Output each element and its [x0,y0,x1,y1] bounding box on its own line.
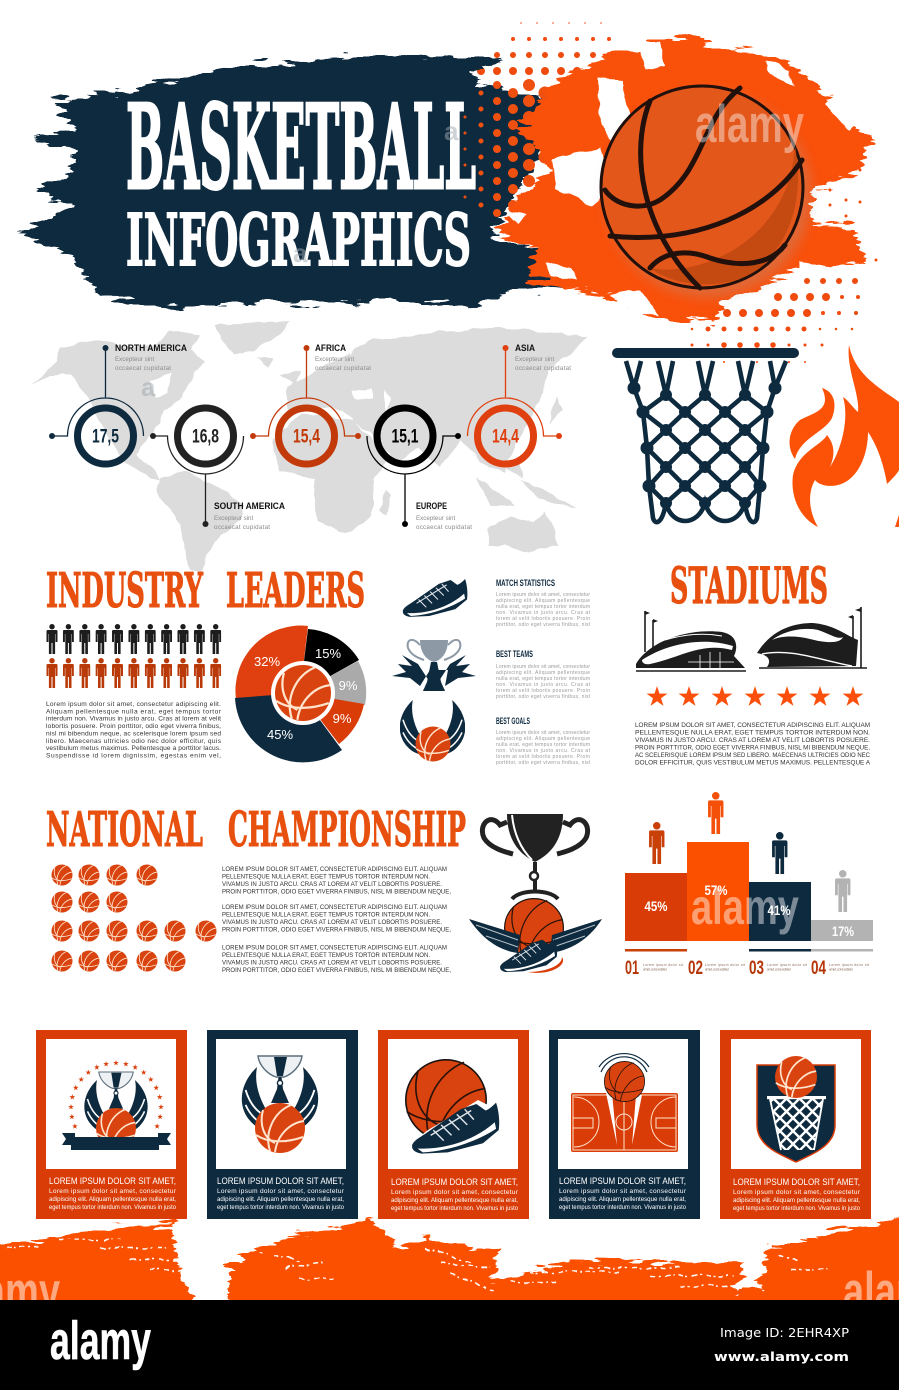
card text [733,1177,861,1212]
text: match statistics: porttitor, odio eget viverra finibus, nisl [496,622,590,628]
marker: Asia 14,4 [468,343,571,464]
panel: header banner: a [293,238,308,268]
footer image id: Image ID: 2EHR4XP [720,1326,849,1340]
card text: Lorem ipsum dolor sit amet, consectetur [559,1188,687,1195]
text block: lobortis posuere. Proin porttitor, odio eget viverra finibus, [46,723,221,730]
text block: vestibulum metus maximus. Pellentesque a porttitor lacus. [46,745,221,752]
panel: card 2 winged trophy [207,1030,358,1219]
card text: eget tempus tortor interdum non. Vivamus in justo [49,1204,176,1211]
text: best teams: adipiscing elit. Aliquam pellentesque [496,670,590,676]
marker: Asia 14,4: Excepteur sint [515,356,554,363]
card text [217,1176,345,1211]
text: best goals: porttitor, odio eget viverra finibus, nisl [496,760,590,766]
text block: LOREM IPSUM DOLOR SIT AMET, CONSECTETUR ADIPISCING ELIT. ALIQUAM [635,722,870,729]
card text: Lorem ipsum dolor sit amet, consectetur [49,1188,177,1195]
podium chart: alamy [691,879,799,935]
text: match statistics [496,578,591,628]
icon: shield, hoop and ball [757,1056,835,1162]
text: best teams: non. Vivamus in justo arcu. Cras at [496,682,591,688]
star rating [647,686,863,706]
icon: star arc [68,1060,164,1129]
heading: CHAMPIONSHIP [228,803,466,858]
card text [391,1177,519,1212]
text: match statistics: lorem at velit lobortis posuere. Proin [496,616,590,622]
icon: flame [790,345,899,527]
podium chart: Lorem ipsum dolor sit [767,963,807,967]
podium chart: amet, cons ectetur [643,968,668,972]
text: best goals: adipiscing elit. Aliquam pellentesque [496,736,590,742]
marker: South America 16,8 [150,408,285,531]
card text: LOREM IPSUM DOLOR SIT AMET, [733,1177,860,1187]
card text [559,1176,687,1211]
navy brush stroke [17,55,582,307]
card text: Lorem ipsum dolor sit amet, consectetur [733,1189,861,1196]
icon: trophy, basketball, wings and sneaker [469,814,602,973]
marker: Europe 15,1: 15,1 [392,426,419,448]
icon: emblem [242,1056,318,1153]
text: match statistics: MATCH STATISTICS [496,578,555,589]
text paragraphs [222,866,451,974]
card text: adipiscing elit. Aliquam pellentesque nulla erat, [559,1196,686,1203]
panel: stadiums [635,558,870,766]
footer logo: alamy [50,1311,151,1371]
text: best goals: BEST GOALS [496,716,530,727]
halftone dots: top rows [481,23,625,71]
title: BASKETBALL: BASKETBALL [126,79,476,216]
donut chart: 45% [267,727,293,742]
card text: eget tempus tortor interdum non. Vivamus in justo [217,1204,344,1211]
text block [635,722,870,766]
card text [49,1176,177,1211]
text paragraphs: LOREM IPSUM DOLOR SIT AMET, CONSECTETUR ADIPISCING ELIT. ALIQUAM [222,944,447,952]
icon: sneaker [403,579,467,617]
footer url: www.alamy.com [714,1349,849,1364]
heading: LEADERS [226,564,365,619]
marker: North America 17,5 [49,343,187,464]
card text: adipiscing elit. Aliquam pellentesque nulla erat, [217,1196,344,1203]
card text: LOREM IPSUM DOLOR SIT AMET, [217,1176,344,1186]
donut chart: 9% [333,711,352,726]
icon: winged basketball [400,700,465,762]
marker: Asia 14,4: 14,4 [492,426,519,448]
watermark fragments [0,1260,899,1322]
card text: eget tempus tortor interdum non. Vivamus in justo [391,1205,518,1212]
podium chart: 41% [768,902,791,918]
text: best teams: BEST TEAMS [496,649,533,660]
heading [46,564,365,619]
orange paint splash [496,33,871,323]
title: INFOGRAPHICS: INFOGRAPHICS [126,198,471,282]
marker: Africa 15,4: Excepteur sint [315,356,354,363]
text block: Suspendisse id lorem dignissim, egestas enim vel, [46,752,221,760]
podium chart: amet, cons ectetur [705,968,730,972]
text block [46,701,222,760]
panel: national championship [46,792,873,979]
heading [46,803,466,858]
text: best teams [496,649,591,700]
text block: VIVAMUS IN JUSTO ARCU. CRAS AT LOREM AT VELIT LOBORTIS POSUERE. [635,737,870,744]
podium chart: 03 [749,958,764,979]
card text: adipiscing elit. Aliquam pellentesque nulla erat, [49,1196,176,1203]
pictogram: basketball counts [52,864,216,972]
panel: card 4 court [549,1030,700,1219]
footer bar [0,1300,899,1390]
card text: eget tempus tortor interdum non. Vivamus in justo [733,1205,860,1212]
panel: card 3 ball and sneaker [378,1030,529,1219]
marker: Europe 15,1: occaecat cupidatat [416,524,472,531]
podium chart: 57% [704,882,728,898]
panel: industry leaders [46,564,366,762]
marker: South America 16,8: occaecat cupidatat [214,524,270,531]
icon: left stadium [636,611,746,671]
donut chart [235,626,366,762]
icon: right stadium [757,607,867,668]
white paint speckles [5,1240,830,1290]
white paint gaps in the splash [505,42,860,316]
text paragraphs: LOREM IPSUM DOLOR SIT AMET, CONSECTETUR ADIPISCING ELIT. ALIQUAM [222,866,447,873]
text paragraphs: VIVAMUS IN JUSTO ARCU. CRAS AT LOREM AT VELIT LOBORTIS POSUERE. [222,881,442,888]
text block: DOLOR EFFICITUR, QUIS VESTIBULUM METUS MAXIMUS. PELLENTESQUE A [635,760,870,766]
marker: Africa 15,4: AFRICA [315,343,346,353]
text paragraphs: VIVAMUS IN JUSTO ARCU. CRAS AT LOREM AT VELIT LOBORTIS POSUERE. [222,960,442,966]
marker: Asia 14,4: occaecat cupidatat [515,365,571,372]
halftone dots over the navy brush [465,85,545,213]
pictogram: black people row [46,624,221,654]
card text: LOREM IPSUM DOLOR SIT AMET, [559,1176,686,1186]
text paragraphs: PELLENTESQUE NULLA ERAT, EGET TEMPUS TORTOR INTERDUM NON. [222,874,430,880]
text block: PELLENTESQUE NULLA ERAT, EGET TEMPUS TORTOR INTERDUM NON. [635,730,870,736]
text: best goals: Lorem ipsum dolor sit amet, consectetur [496,730,590,736]
podium chart: amet, cons ectetur [767,968,792,972]
text: best teams: nulla erat, eget tempus tortor interdum [496,676,590,682]
donut chart: 15% [315,646,341,661]
icon: basketball hoop and net [612,348,799,522]
panel: card 5 shield [720,1030,871,1219]
panel: card 1 trophy emblem [36,1030,187,1219]
marker: North America 17,5: Excepteur sint [115,356,154,363]
text: match statistics: non. Vivamus in justo arcu. Cras at [496,610,591,616]
donut chart: 9% [339,678,358,693]
marker: North America 17,5: occaecat cupidatat [115,365,171,372]
card text: Lorem ipsum dolor sit amet, consectetur [217,1188,345,1195]
podium chart: 02 [688,958,703,979]
pictogram: red people row [46,658,221,688]
panel: regional statistics [49,343,571,531]
text block: nisl mi bibendum neque, ac scelerisque lorem ipsum sed [46,730,221,737]
card text: Lorem ipsum dolor sit amet, consectetur [391,1189,519,1196]
card text: LOREM IPSUM DOLOR SIT AMET, [391,1177,518,1187]
card text: adipiscing elit. Aliquam pellentesque nulla erat, [391,1197,518,1204]
text block: Aliquam pellentesque nulla erat, eget tempus tortor [46,708,222,715]
world map [31,320,589,572]
marker: Europe 15,1: Excepteur sint [416,515,455,522]
marker: Africa 15,4: occaecat cupidatat [315,365,371,372]
text: best goals: lorem at velit lobortis posuere. Proin [496,754,590,760]
marker: Europe 15,1: EUROPE [416,501,447,511]
marker: Africa 15,4: 15,4 [293,426,320,448]
text paragraphs: PELLENTESQUE NULLA ERAT, EGET TEMPUS TORTOR INTERDUM NON. [222,912,430,918]
text: best teams: porttitor, odio eget viverra finibus, nisl [496,694,590,700]
podium chart: 45% [644,898,668,914]
text: best teams: lorem at velit lobortis posuere. Proin [496,688,590,694]
card text: LOREM IPSUM DOLOR SIT AMET, [49,1176,176,1186]
text: best goals: nulla erat, eget tempus tortor interdum [496,742,590,748]
podium chart: 17% [832,923,854,939]
text: best teams: Lorem ipsum dolor sit amet, consectetur [496,664,590,670]
podium chart: 04 [811,958,826,979]
card text: adipiscing elit. Aliquam pellentesque nulla erat, [733,1197,860,1204]
heading: INDUSTRY [46,564,203,619]
text block: libero. Maecenas ultricies odio nec dolor efficitur, quis [46,738,222,745]
text paragraphs: VIVAMUS IN JUSTO ARCU. CRAS AT LOREM AT VELIT LOBORTIS POSUERE. [222,919,442,926]
text: best goals [496,716,591,766]
text: best goals: non. Vivamus in justo arcu. Cras at [496,748,591,754]
marker: North America 17,5: NORTH AMERICA [115,343,187,353]
marker: Asia 14,4: ASIA [515,343,535,353]
text: match statistics: Lorem ipsum dolor sit amet, consectetur [496,592,590,598]
marker: Africa 15,4 [250,343,371,464]
marker: Europe 15,1 [367,408,472,531]
text block: AC SCELERISQUE LOREM IPSUM SED LIBERO. MAECENAS ULTRICIES ODIO NEC [635,752,870,759]
text block: PROIN PORTTITOR, ODIO EGET VIVERRA FINIBUS, NISL MI BIBENDUM NEQUE, [635,744,870,752]
text paragraphs: PROIN PORTTITOR, ODIO EGET VIVERRA FINIBUS, NISL MI BIBENDUM NEQUE, [222,926,451,934]
halftone dots: lower right [692,170,876,362]
podium chart: Lorem ipsum dolor sit [705,963,745,967]
marker: South America 16,8: 16,8 [192,426,219,448]
text: match statistics: nulla erat, eget tempus tortor interdum [496,604,590,610]
podium chart: amet, cons ectetur [829,968,854,972]
text block: interdum non. Vivamus in justo arcu. Cras at lorem at velit [46,716,221,723]
heading: STADIUMS [670,558,828,616]
icon: large basketball [601,86,811,297]
marker: South America 16,8: SOUTH AMERICA [214,501,285,511]
panel: header banner: a [444,116,459,146]
icon: trophy with flames [392,640,476,691]
panel: header banner [17,23,876,362]
podium chart [625,792,873,979]
watermark on ball: alamy [695,95,804,154]
card text: eget tempus tortor interdum non. Vivamus in justo [559,1204,686,1211]
panel: icon list [392,578,591,766]
text block: Lorem ipsum dolor sit amet, consectetur adipiscing elit. [46,701,221,708]
icon: ball and sneaker [406,1060,501,1157]
marker: South America 16,8: Excepteur sint [214,515,253,522]
marker: North America 17,5: 17,5 [92,426,119,448]
bottom orange brush band [0,1214,899,1322]
text paragraphs: PROIN PORTTITOR, ODIO EGET VIVERRA FINIBUS, NISL MI BIBENDUM NEQUE, [222,888,451,896]
podium chart: Lorem ipsum dolor sit [643,963,683,967]
heading: NATIONAL [46,803,203,858]
panel: regional statistics: a [141,372,156,402]
donut chart: 32% [254,654,280,669]
podium chart: 01 [625,958,639,979]
text paragraphs: LOREM IPSUM DOLOR SIT AMET, CONSECTETUR ADIPISCING ELIT. ALIQUAM [222,904,447,911]
text: match statistics: adipiscing elit. Aliquam pellentesque [496,598,590,604]
podium chart: Lorem ipsum dolor sit [829,963,869,967]
text paragraphs: PROIN PORTTITOR, ODIO EGET VIVERRA FINIBUS, NISL MI BIBENDUM NEQUE, [222,967,451,974]
icon: emblem [62,1072,171,1150]
icon: court with ball [571,1054,678,1152]
text paragraphs: PELLENTESQUE NULLA ERAT, EGET TEMPUS TORTOR INTERDUM NON. [222,952,430,959]
